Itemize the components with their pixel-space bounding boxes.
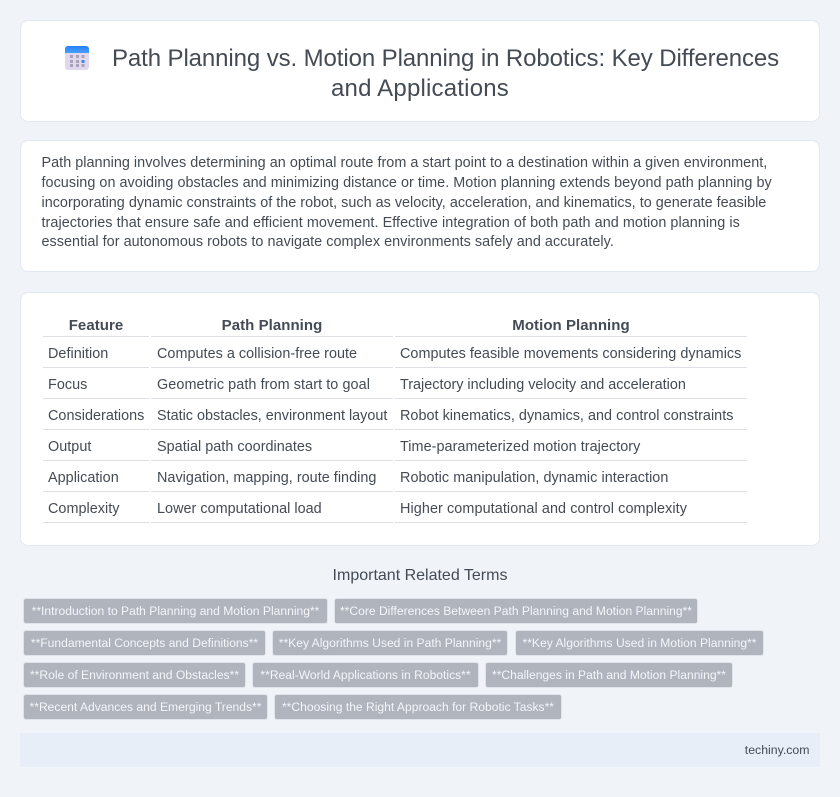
text block: introduction: Path planning involves determining an optimal route from a start point to a destination within a given environment, bbox=[42, 155, 767, 171]
tag: **Role of Environment and Obstacles** bbox=[30, 668, 239, 682]
row: Complexity: Complexity bbox=[48, 501, 119, 517]
tag bbox=[252, 662, 479, 688]
tag bbox=[23, 630, 266, 656]
text block: introduction: incorporating dynamic constraints of the robot, such as velocity, acceleration, and kinematics, to generate feasible bbox=[42, 195, 766, 211]
table header: Path Planning: Path Planning bbox=[222, 317, 322, 334]
tag: **Choosing the Right Approach for Robotic Tasks** bbox=[282, 700, 554, 714]
row: Focus: Geometric path from start to goal bbox=[157, 377, 370, 393]
tag bbox=[23, 694, 268, 720]
row: Output: Output bbox=[48, 439, 91, 455]
row: Output: Spatial path coordinates bbox=[157, 439, 312, 455]
panel: introduction card bbox=[20, 140, 820, 272]
row: Complexity bbox=[48, 501, 687, 517]
tag bbox=[23, 662, 246, 688]
text block: introduction: trajectories that ensure safe and efficient movement. Effective integration of both path and motion planning is bbox=[42, 215, 740, 231]
table header: Feature: Feature bbox=[69, 317, 123, 334]
row: Definition bbox=[48, 346, 741, 362]
text block: introduction: essential for autonomous robots to navigate complex environments safely and accurately. bbox=[42, 234, 614, 250]
footer text: techiny.com bbox=[745, 743, 810, 757]
tag list bbox=[23, 598, 764, 720]
row: Complexity: Higher computational and control complexity bbox=[400, 501, 687, 517]
tag: **Real-World Applications in Robotics** bbox=[260, 668, 471, 682]
row: Application: Navigation, mapping, route finding bbox=[157, 470, 376, 486]
comparison table bbox=[43, 317, 747, 523]
tag bbox=[274, 694, 562, 720]
row: Considerations: Considerations bbox=[48, 408, 144, 424]
text block: introduction: focusing on avoiding obstacles and minimizing distance or time. Motion planning extends beyond path planning by bbox=[42, 175, 772, 191]
tag bbox=[515, 630, 764, 656]
tag bbox=[334, 598, 698, 624]
title: and Applications bbox=[331, 75, 509, 102]
row: Considerations bbox=[48, 408, 733, 424]
tag: **Recent Advances and Emerging Trends** bbox=[30, 700, 261, 714]
title bbox=[112, 45, 779, 102]
row: Output: Time-parameterized motion trajectory bbox=[400, 439, 640, 455]
title: Path Planning vs. Motion Planning in Robotics: Key Differences bbox=[112, 45, 779, 72]
tag bbox=[485, 662, 733, 688]
row: Complexity: Lower computational load bbox=[157, 501, 322, 517]
tag bbox=[23, 598, 328, 624]
row: Application bbox=[48, 470, 668, 486]
row: Considerations: Robot kinematics, dynamics, and control constraints bbox=[400, 408, 733, 424]
row: Output bbox=[48, 439, 640, 455]
tag: **Core Differences Between Path Planning and Motion Planning** bbox=[340, 604, 692, 618]
tag bbox=[272, 630, 508, 656]
tag: **Introduction to Path Planning and Motion Planning** bbox=[32, 604, 319, 618]
panel: header card bbox=[20, 20, 820, 122]
row: Application: Application bbox=[48, 470, 119, 486]
heading: Important Related Terms: Important Related Terms bbox=[333, 567, 507, 584]
row: Focus: Trajectory including velocity and acceleration bbox=[400, 377, 686, 393]
row: Definition: Definition bbox=[48, 346, 108, 362]
row: Considerations: Static obstacles, environment layout bbox=[157, 408, 387, 424]
table header: Motion Planning: Motion Planning bbox=[512, 317, 630, 334]
footer bar bbox=[20, 733, 820, 767]
row: Focus: Focus bbox=[48, 377, 87, 393]
row: Definition: Computes a collision-free route bbox=[157, 346, 357, 362]
tag: **Key Algorithms Used in Path Planning** bbox=[279, 636, 501, 650]
panel: comparison table card bbox=[20, 292, 820, 546]
row: Focus bbox=[48, 377, 686, 393]
tag: **Challenges in Path and Motion Planning** bbox=[492, 668, 726, 682]
icon: calendar bbox=[65, 46, 89, 70]
tag: **Key Algorithms Used in Motion Planning** bbox=[523, 636, 756, 650]
tag: **Fundamental Concepts and Definitions** bbox=[31, 636, 258, 650]
row: Definition: Computes feasible movements considering dynamics bbox=[400, 346, 741, 362]
row: Application: Robotic manipulation, dynamic interaction bbox=[400, 470, 668, 486]
text block: introduction bbox=[42, 155, 772, 250]
